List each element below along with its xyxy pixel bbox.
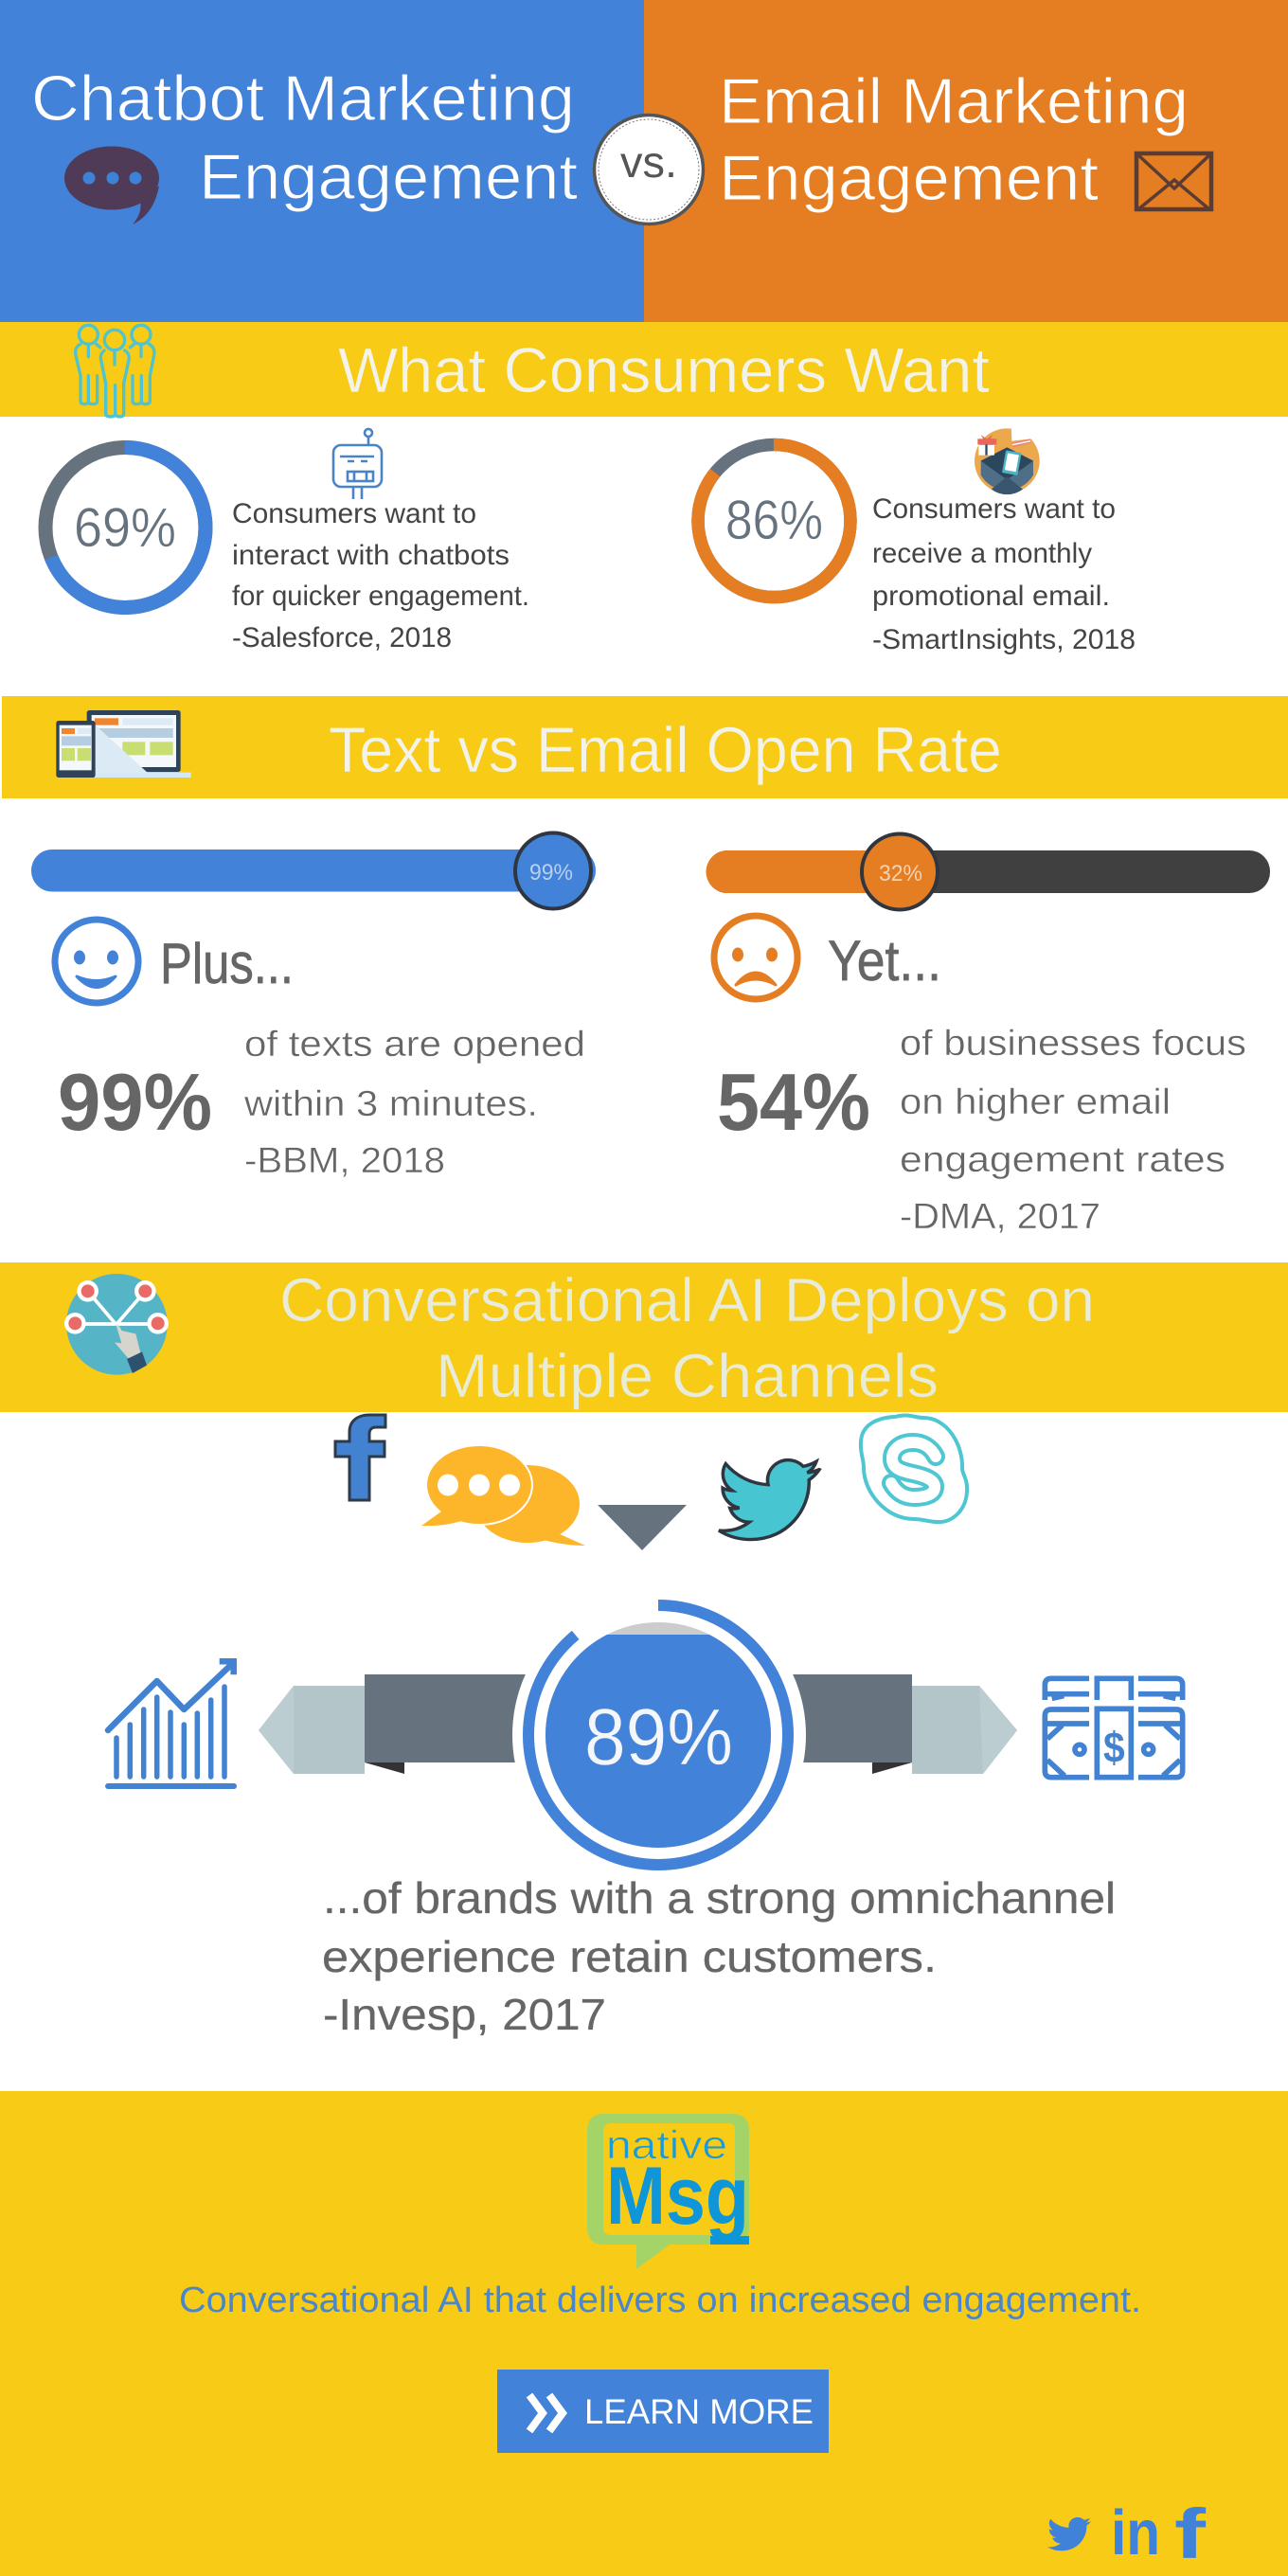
title: chatbot marketing engagement bbox=[31, 63, 578, 213]
donut chart: 69%: 69% bbox=[74, 497, 176, 559]
progress bar: text open rate 99%: 99% bbox=[529, 860, 573, 886]
icon: envelope bbox=[1136, 153, 1211, 209]
panel: header bbox=[0, 0, 1288, 322]
panel: conversational ai channels bbox=[0, 1262, 1288, 2039]
heading band bbox=[0, 1262, 1288, 1412]
progress bar: email open rate 32%: 32% bbox=[879, 861, 922, 886]
panel: text vs email open rate bbox=[2, 696, 1288, 1237]
text: chatbots stat: -Salesforce, 2018 bbox=[232, 622, 452, 653]
arrow: down triangle bbox=[598, 1505, 687, 1550]
ribbon: right tip shade bbox=[979, 1686, 1017, 1774]
icon: smiley bbox=[55, 920, 138, 1003]
social icons bbox=[1047, 2495, 1206, 2573]
text: email stat: promotional email. bbox=[872, 581, 1110, 612]
heading: what consumers want: What Consumers Want bbox=[338, 335, 990, 406]
badge: 89%: 89% bbox=[584, 1692, 733, 1781]
text: email stat: receive a monthly bbox=[872, 538, 1092, 569]
text: texts opened: within 3 minutes. bbox=[243, 1084, 538, 1124]
text: yet: Yet... bbox=[828, 929, 941, 993]
logo: native msg: Msg bbox=[606, 2151, 749, 2242]
progress bar: text open rate 99% bbox=[31, 833, 596, 909]
title: email marketing engagement bbox=[719, 65, 1189, 214]
stat: 99%: 99% bbox=[58, 1058, 212, 1148]
text: omnichannel stat: experience retain customers. bbox=[322, 1932, 937, 1981]
icon: twitter bbox=[719, 1460, 819, 1540]
versus badge bbox=[595, 116, 703, 224]
panel: what consumers want bbox=[0, 322, 1288, 655]
icon: money: $ bbox=[1103, 1724, 1125, 1772]
icon: money bbox=[1045, 1678, 1183, 1778]
icon: network touch bbox=[64, 1274, 169, 1375]
tagline: Conversational AI that delivers on increased engagement. bbox=[179, 2281, 1141, 2320]
versus badge: vs. bbox=[620, 137, 677, 187]
text: email stat: Consumers want to bbox=[872, 493, 1116, 525]
logo: native msg: native bbox=[606, 2122, 727, 2167]
icon: people bbox=[76, 325, 154, 417]
icon: sad face bbox=[714, 916, 797, 999]
stat: 54%: 54% bbox=[717, 1058, 870, 1148]
icon: skype bbox=[861, 1415, 967, 1522]
heading band bbox=[0, 322, 1288, 417]
text: businesses focus: engagement rates bbox=[900, 1140, 1225, 1180]
progress bar: email open rate 32% bbox=[707, 833, 1270, 909]
social icons: in bbox=[1111, 2497, 1160, 2568]
donut chart: 69% bbox=[45, 447, 206, 608]
text: chatbots stat: interact with chatbots bbox=[232, 540, 510, 571]
icon: facebook bbox=[335, 1415, 385, 1500]
heading: text vs email open rate: Text vs Email Open Rate bbox=[329, 714, 1002, 786]
text: chatbots stat bbox=[232, 498, 529, 653]
logo: native msg bbox=[587, 2114, 749, 2269]
ribbon: light right bbox=[912, 1686, 1017, 1774]
text: omnichannel stat: -Invesp, 2017 bbox=[323, 1990, 606, 2039]
ribbon: folds bbox=[365, 1762, 912, 1774]
icon: email promotion bbox=[975, 424, 1040, 494]
text: businesses focus: -DMA, 2017 bbox=[900, 1197, 1100, 1237]
text: chatbots stat: for quicker engagement. bbox=[232, 581, 529, 612]
text: chatbots stat: Consumers want to bbox=[232, 498, 476, 529]
text: plus: Plus... bbox=[160, 932, 294, 995]
orange half background bbox=[644, 0, 1288, 322]
blue half background bbox=[0, 0, 644, 322]
text: businesses focus: of businesses focus bbox=[900, 1024, 1246, 1064]
text: texts opened: -BBM, 2018 bbox=[244, 1141, 445, 1181]
title: chatbot marketing engagement: Chatbot Marketing bbox=[31, 63, 575, 134]
button: learn more: LEARN MORE bbox=[584, 2392, 814, 2431]
ribbon: dark band bbox=[365, 1674, 912, 1762]
text: omnichannel stat bbox=[322, 1873, 1116, 2039]
button: learn more bbox=[497, 2370, 829, 2453]
text: texts opened: of texts are opened bbox=[244, 1025, 585, 1064]
text: email stat: -SmartInsights, 2018 bbox=[872, 624, 1136, 655]
text: businesses focus bbox=[900, 1024, 1246, 1237]
donut chart: 86% bbox=[698, 445, 850, 597]
panel: footer bbox=[0, 2091, 1288, 2576]
text: omnichannel stat: ...of brands with a strong omnichannel bbox=[323, 1873, 1116, 1923]
heading: conversational ai deploys on multiple channels bbox=[279, 1265, 1095, 1410]
title: chatbot marketing engagement: Engagement bbox=[199, 141, 578, 213]
text: email stat bbox=[872, 493, 1136, 655]
icon: robot bbox=[333, 429, 382, 499]
title: email marketing engagement: Email Marketing bbox=[719, 65, 1189, 137]
badge: 89% bbox=[512, 1588, 806, 1882]
ribbon: left tip shade bbox=[259, 1686, 294, 1774]
icon: devices bbox=[56, 710, 191, 778]
icon: chat bubble bbox=[64, 146, 159, 224]
title: email marketing engagement: Engagement bbox=[719, 142, 1099, 214]
footer background bbox=[0, 2091, 1288, 2576]
heading band bbox=[2, 696, 1288, 798]
heading: conversational ai deploys on multiple channels: Multiple Channels bbox=[436, 1341, 939, 1410]
text: businesses focus: on higher email bbox=[900, 1082, 1171, 1122]
ribbon: light left bbox=[259, 1686, 365, 1774]
social icons: f bbox=[1174, 2495, 1206, 2573]
icon: growth chart bbox=[108, 1661, 234, 1786]
icon: chat bubbles bbox=[421, 1444, 585, 1546]
donut chart: 86%: 86% bbox=[725, 490, 823, 551]
heading: conversational ai deploys on multiple channels: Conversational AI Deploys on bbox=[279, 1265, 1095, 1334]
text: texts opened bbox=[243, 1025, 585, 1181]
